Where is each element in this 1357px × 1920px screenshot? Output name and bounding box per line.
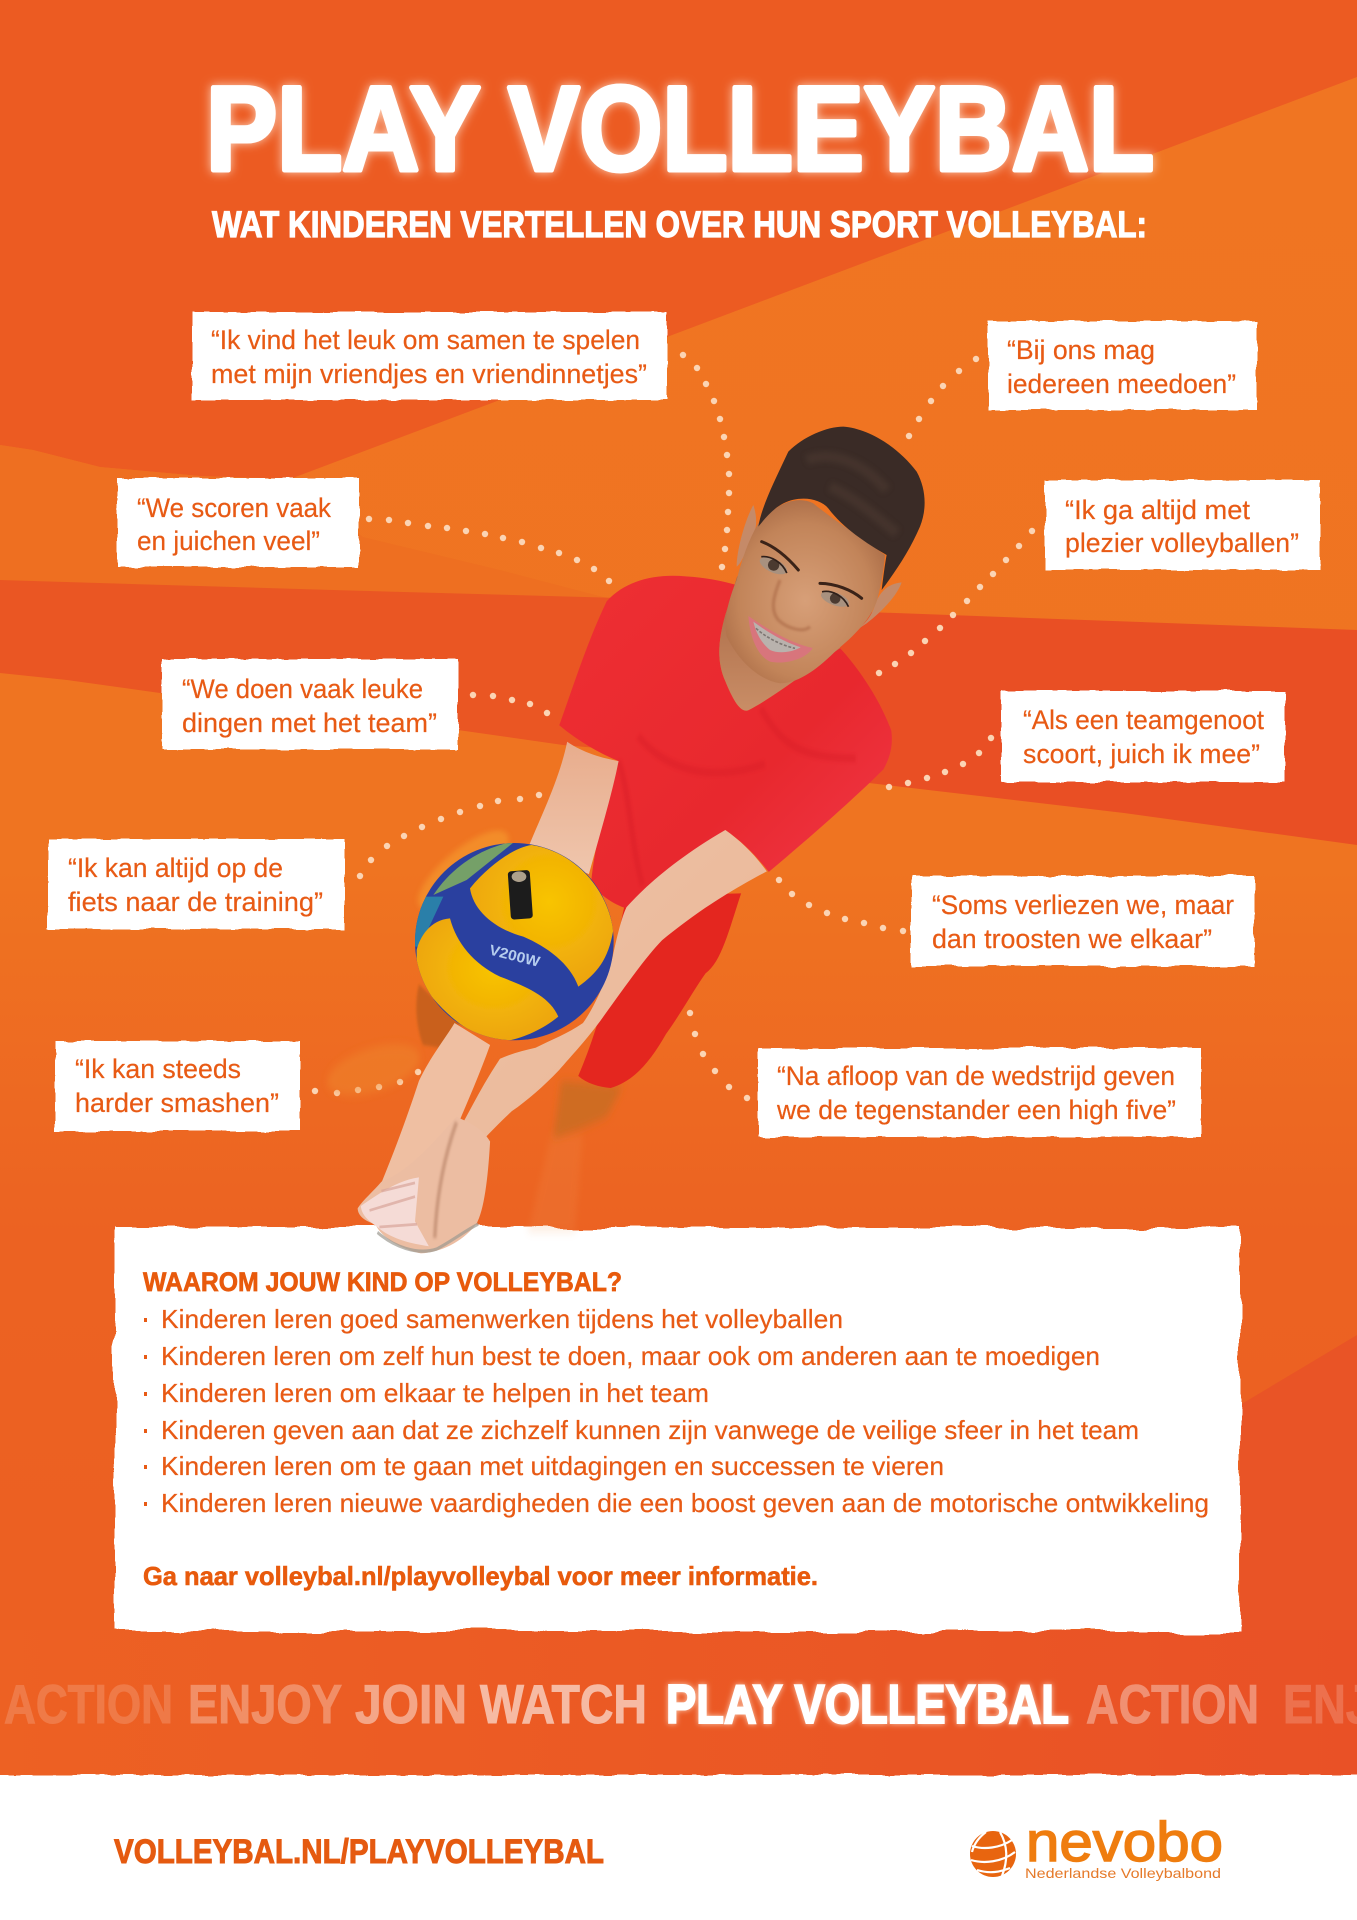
- front leg: [553, 1081, 623, 1139]
- ball label: V200W: [487, 943, 542, 971]
- quote: fiets: “Ik kan altijd op de: [68, 853, 283, 883]
- quote: teamgenoot scoort: [1001, 691, 1285, 782]
- bullet list: Kinderen leren om zelf hun best te doen, maar ook om anderen aan te moedigen: [161, 1341, 1100, 1371]
- word band: [4, 1673, 1357, 1735]
- quote: high five: we de tegenstander een high five”: [776, 1095, 1176, 1125]
- right eyebrow: [820, 583, 862, 598]
- teeth with braces: [753, 622, 801, 652]
- body traced in scaled coordinates: [324, 576, 892, 1253]
- quote: smashen: harder smashen”: [75, 1088, 279, 1118]
- fingers: [361, 1177, 429, 1246]
- quote: smashen: “Ik kan steeds: [75, 1054, 241, 1084]
- hand shadow: [377, 1224, 478, 1251]
- right eye: [819, 588, 852, 610]
- neck: [719, 576, 840, 711]
- word band: ACTION: [1086, 1673, 1259, 1735]
- quote: leuke dingen: “We doen vaak leuke: [182, 674, 423, 704]
- icon: volleyball: [970, 1831, 1016, 1877]
- hand crease: [435, 1122, 456, 1238]
- left eyebrow: [762, 542, 798, 570]
- bullet list: Kinderen geven aan dat ze zichzelf kunnen zijn vanwege de veilige sfeer in het team: [161, 1415, 1139, 1445]
- word band: ACTION: [4, 1673, 173, 1735]
- quote: troosten: dan troosten we elkaar”: [932, 924, 1212, 954]
- bullet list: [144, 1304, 1209, 1518]
- quote: plezier: “Ik ga altijd met: [1065, 495, 1250, 525]
- quote: leuke dingen: dingen met het team”: [182, 708, 437, 738]
- lower left forearm: [381, 1023, 490, 1183]
- quote: troosten: “Soms verliezen we, maar: [932, 890, 1234, 920]
- upper left arm: [528, 742, 619, 874]
- wordmark: nevobo: [1026, 1810, 1223, 1873]
- word band: ENJOY: [188, 1673, 342, 1735]
- t-shirt: [559, 576, 892, 910]
- left ear: [737, 505, 756, 567]
- dotted connectors: [312, 352, 1035, 1101]
- quote: fiets: fiets naar de training”: [68, 887, 323, 917]
- quote: high five: [758, 1048, 1201, 1137]
- bullet list: Kinderen leren om te gaan met uitdagingen en successen te vieren: [161, 1451, 944, 1481]
- call to action: Ga naar volleybal.nl/playvolleybal voor meer informatie.: [143, 1561, 818, 1591]
- quote: leuke dingen: [162, 659, 458, 749]
- quote: fiets: [48, 839, 344, 929]
- quote: scoren en juichen: “We scoren vaak: [137, 493, 331, 523]
- word band: JOIN: [355, 1673, 467, 1735]
- motion blur ghosts: [324, 1035, 423, 1105]
- lips: [748, 616, 813, 663]
- quote: troosten: [911, 876, 1254, 966]
- quote: samen spelen: “Ik vind het leuk om samen te spelen: [211, 325, 640, 355]
- panel heading: WAAROM JOUW KIND OP VOLLEYBAL?: [143, 1267, 622, 1297]
- nose shadow: [773, 580, 810, 630]
- footer: white strip: [0, 1775, 1357, 1920]
- right arm: [456, 830, 767, 1139]
- tagline: Nederlandse Volleybalbond: [1025, 1865, 1221, 1881]
- photo: volleyball player: [324, 427, 925, 1253]
- quote: iedereen meedoen: “Bij ons mag: [1007, 335, 1155, 365]
- quote: iedereen meedoen: [988, 321, 1257, 410]
- hands: [358, 1117, 490, 1253]
- quote: samen spelen: met mijn vriendjes en vriendinnetjes”: [211, 359, 647, 389]
- footer url: VOLLEYBAL.NL/PLAYVOLLEYBAL: [114, 1833, 604, 1871]
- blue and teal edge: [415, 896, 444, 947]
- right ear: [852, 582, 902, 633]
- quote: samen spelen: [192, 312, 667, 400]
- shorts: [578, 893, 741, 1088]
- ball: [414, 830, 614, 1040]
- panel: waarom volleybal: [115, 1227, 1239, 1631]
- bullet list: Kinderen leren goed samenwerken tijdens het volleyballen: [161, 1304, 843, 1334]
- bullet list: Kinderen leren nieuwe vaardigheden die een boost geven aan de motorische ontwikkeling: [161, 1488, 1209, 1518]
- quote: high five: “Na afloop van de wedstrijd geven: [777, 1061, 1175, 1091]
- ball sticker: [508, 870, 533, 920]
- subtitle: WAT KINDEREN VERTELLEN OVER HUN SPORT VOLLEYBAL:: [212, 204, 1147, 245]
- purple edge: [560, 963, 617, 1043]
- word band: PLAY VOLLEYBAL: [666, 1673, 1069, 1735]
- back leg: [416, 984, 460, 1048]
- quote: plezier: [1045, 480, 1320, 570]
- quote: smashen: [55, 1041, 300, 1131]
- quote: teamgenoot scoort: scoort, juich ik mee”: [1023, 739, 1260, 769]
- face: [726, 500, 885, 683]
- quote: teamgenoot scoort: “Als een teamgenoot: [1023, 705, 1264, 735]
- quote: iedereen meedoen: iedereen meedoen”: [1007, 369, 1236, 399]
- hair: [758, 427, 925, 590]
- word band: WATCH: [480, 1673, 647, 1735]
- motion trail: [407, 818, 520, 922]
- quote: scoren en juichen: [117, 478, 359, 567]
- nevobo logo: [970, 1810, 1223, 1881]
- quote: plezier: plezier volleyballen”: [1065, 528, 1299, 558]
- quote: scoren en juichen: en juichen veel”: [137, 526, 320, 556]
- hair highlight: [807, 457, 897, 533]
- head: [726, 427, 925, 683]
- yellow panel upper: [470, 845, 613, 987]
- left eye: [757, 553, 790, 578]
- yellow panel lower: [417, 918, 558, 1042]
- title: PLAY VOLLEYBAL: [206, 62, 1154, 196]
- bullet list: Kinderen leren om elkaar te helpen in het team: [161, 1378, 709, 1408]
- shirt folds: [619, 709, 856, 885]
